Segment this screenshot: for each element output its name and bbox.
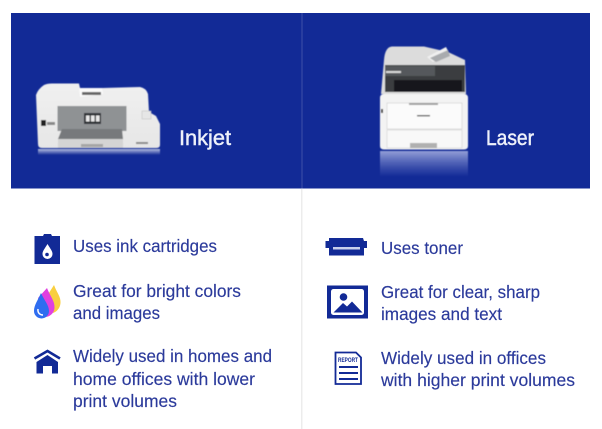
icon: laser printer [380,46,468,177]
text: great for clear, sharp: images and text [381,304,502,324]
panel: inkjet features [34,234,272,411]
label: Laser: Laser [486,126,534,150]
text: great for bright colors: and images [73,303,160,323]
text: widely used in homes: print volumes [73,391,177,411]
text: uses toner: Uses toner [381,238,463,258]
icon: report document [336,352,361,384]
text: uses ink cartridges: Uses ink cartridges [73,236,217,256]
icon: ink cartridge [34,234,60,264]
text: widely used in offices: Widely used in offices [381,348,546,368]
text: great for bright colors [73,281,241,323]
text: great for clear, sharp [381,282,540,324]
icon: image frame [327,286,368,318]
icon: house [34,351,60,374]
text: widely used in homes: Widely used in homes and [73,346,272,366]
icon: colour ink drops [34,285,61,318]
text: widely used in homes: home offices with lower [73,369,255,389]
panel: laser features [326,238,575,390]
text: great for bright colors: Great for bright colors [73,281,241,301]
panel: inkjet header [36,84,231,155]
text: widely used in offices [380,348,575,390]
text: widely used in offices: with higher print volumes [380,370,575,390]
text: widely used in homes [73,346,272,411]
label: Inkjet: Inkjet [179,126,231,150]
panel: blue header band [11,13,590,188]
divider between columns [301,189,302,429]
icon: inkjet printer [36,84,160,155]
icon: toner cartridge [326,238,367,256]
icon: report document: REPORT [338,358,358,364]
panel: laser header [380,46,534,177]
text: great for clear, sharp: Great for clear, sharp [381,282,540,302]
